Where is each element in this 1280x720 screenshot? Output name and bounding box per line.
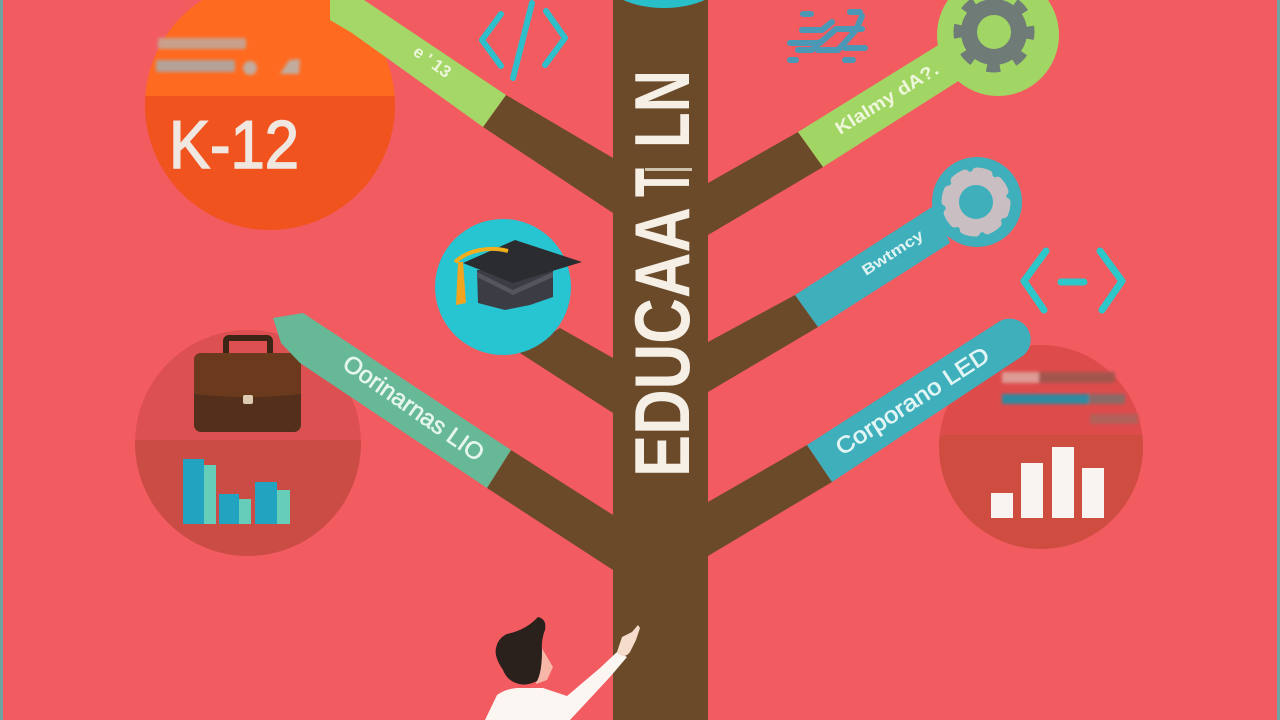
right edge strip <box>1277 0 1280 720</box>
icon: light gear <box>946 172 1006 232</box>
branch: top left: e ' 13 <box>410 42 455 82</box>
branch: top left <box>330 0 613 213</box>
branch: graduation cap <box>435 219 613 413</box>
icon: code brackets right <box>1024 251 1122 310</box>
bar chart: white bars <box>991 447 1104 518</box>
icon: briefcase <box>194 338 301 432</box>
figure: person pointing at trunk <box>485 617 640 720</box>
bar chart: teal bars <box>183 459 290 524</box>
label: right upper bar: Klalmy dA?. <box>832 59 942 138</box>
title: vertical EDUCATION text: T <box>618 168 706 197</box>
icon: code brackets top <box>482 3 565 78</box>
circle panel: K-12 <box>140 0 400 236</box>
branch and label bar: lower right <box>708 319 1031 556</box>
circle panel: briefcase and bars <box>130 325 370 560</box>
title: vertical EDUCATION text: EDUCAA <box>618 207 706 477</box>
branch and label bar: lower right: Corporano LED <box>831 341 994 460</box>
crown: top teal ellipse <box>606 0 722 8</box>
label: K-12: K-12 <box>169 107 299 183</box>
branch and panel: top right with gear <box>708 0 1059 235</box>
icon: circuit lines <box>790 12 865 60</box>
label bar: lower left: Oorinarnas LIO <box>338 350 489 467</box>
icon: graduation cap <box>455 240 582 310</box>
left edge strip <box>0 0 3 720</box>
label: mid right bar: Bwtmcy <box>859 227 928 279</box>
icon: gray gear <box>959 0 1029 67</box>
title: vertical EDUCATION text: LN <box>618 70 706 148</box>
branch and panel: mid right with gear <box>708 157 1022 392</box>
trunk <box>613 0 708 720</box>
circle panel: white bar chart <box>939 345 1143 549</box>
branch: lower left <box>487 450 613 570</box>
label bar: lower left <box>273 313 511 488</box>
